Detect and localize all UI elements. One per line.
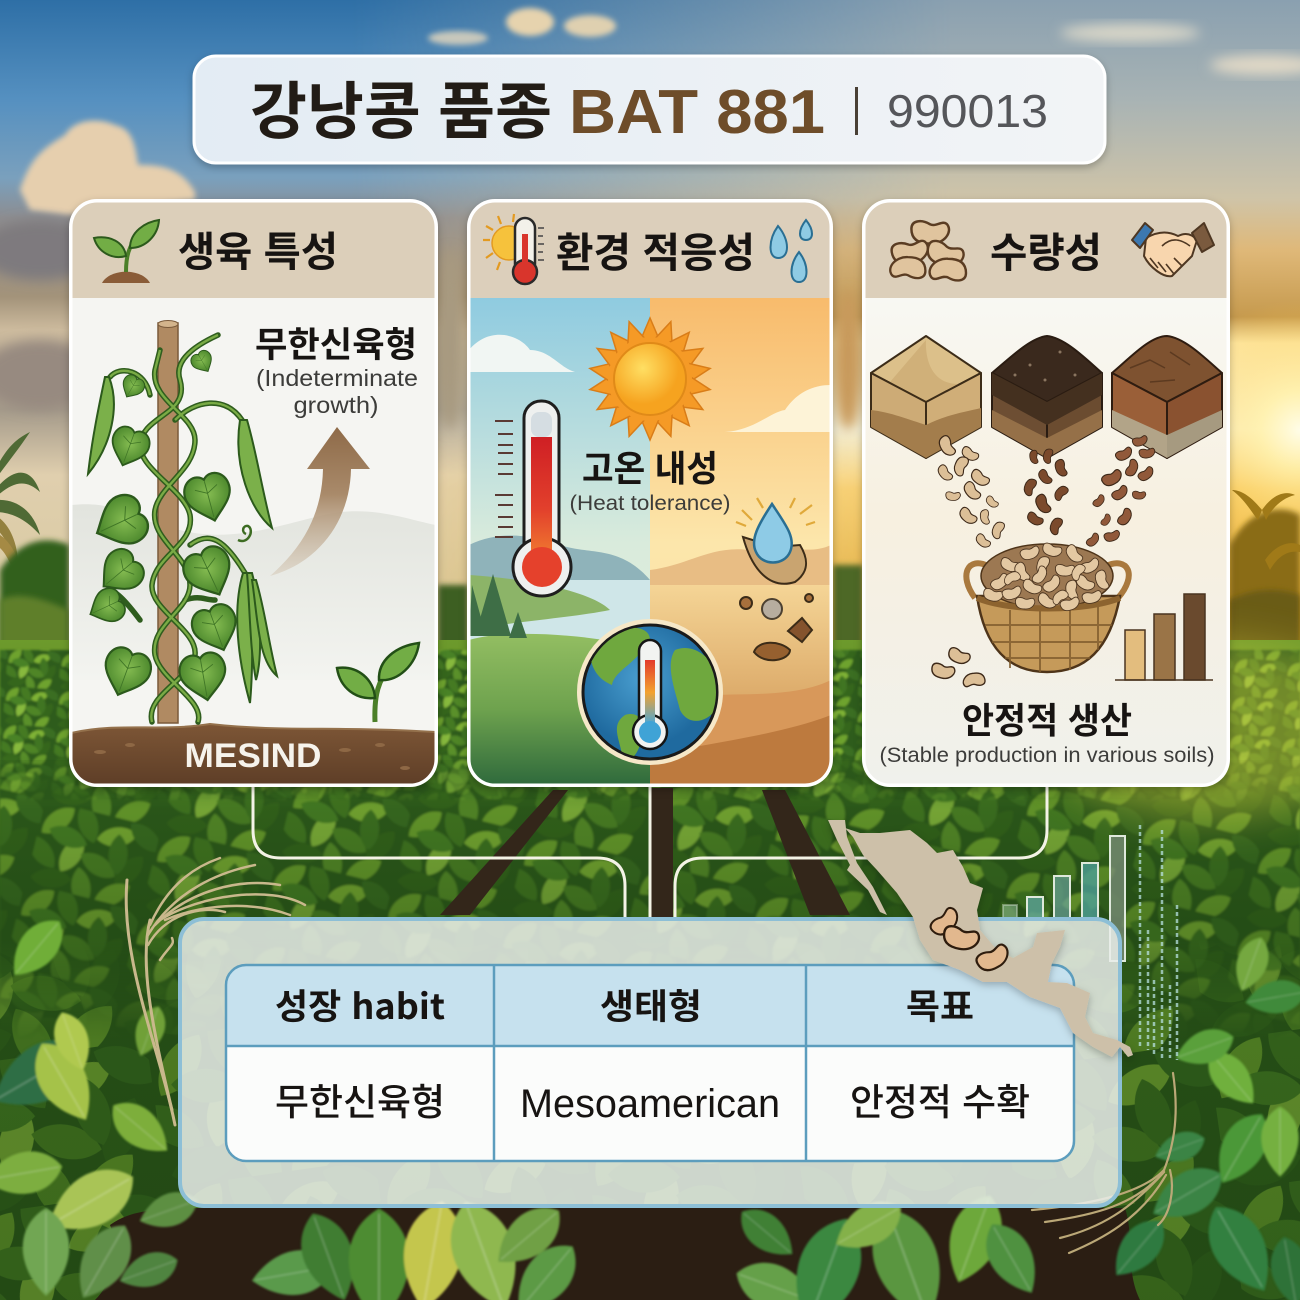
background: sunset sky (0, 0, 1300, 660)
rice stalk: left (126, 858, 305, 1125)
header: growth habit: 성장 habit (275, 979, 445, 1030)
header: goal: 목표 (906, 979, 974, 1030)
connector lines (253, 787, 1047, 918)
falling beans (936, 434, 1156, 550)
heading: 환경 적응성 (556, 219, 755, 279)
heading: 수량성 (990, 219, 1102, 279)
loose beans (931, 646, 986, 688)
header: ecotype: 생태형 (600, 979, 702, 1030)
soil sample: sandy (871, 336, 981, 458)
english label: (Stable production in various soils) (880, 744, 1214, 767)
panel: growth characteristics (69, 199, 438, 788)
icon: handshake (1132, 223, 1214, 276)
accession number: 990013 (887, 85, 1048, 137)
english label: (Indeterminate (256, 365, 418, 391)
value: stable harvest: 안정적 수확 (850, 1072, 1030, 1126)
soil label: MESIND (184, 737, 322, 775)
table (226, 965, 1074, 1161)
value: mesoamerican: Mesoamerican (520, 1082, 780, 1126)
icon: sun (588, 318, 712, 440)
chart bars behind map (1003, 825, 1177, 1060)
background: soybean field (0, 640, 1300, 1300)
panel: summary table card (180, 919, 1120, 1206)
title text: 강낭콩 품종 (250, 61, 552, 151)
map: Mexico and Central America (828, 820, 1133, 1057)
english label (256, 365, 418, 418)
english label: growth) (294, 392, 378, 418)
icon: bean pile (890, 221, 966, 280)
icon: water drops (770, 220, 812, 282)
heading: 생육 특성 (178, 218, 338, 278)
english label: (Heat tolerance) (570, 492, 730, 515)
soil sample: dark loam (992, 336, 1102, 458)
rice stalk: right (1032, 1073, 1176, 1253)
icon: globe with thermometer (577, 619, 723, 765)
soil sample: clay (1112, 336, 1222, 458)
arrow: upward growth (270, 427, 370, 576)
basket of beans (966, 542, 1129, 672)
icon: young seedling (337, 643, 419, 722)
background: tree line (0, 432, 1300, 660)
panel: yield (862, 199, 1230, 788)
icon: sun and thermometer (483, 214, 544, 284)
separator (855, 87, 858, 135)
growth type label: 무한신육형 (255, 317, 417, 368)
title bar (194, 56, 1105, 163)
icon: water drop and dry soil (736, 498, 815, 660)
bar chart: rising yield (1115, 594, 1213, 680)
panel: environmental adaptability (467, 199, 833, 788)
value: indeterminate: 무한신육형 (275, 1072, 445, 1126)
heat tolerance label: 고온 내성 (582, 440, 718, 492)
icon: large thermometer (495, 401, 571, 596)
variety name: BAT 881 (569, 78, 825, 147)
icon: sprout (94, 220, 159, 283)
illustration: climbing bean plant (83, 320, 277, 723)
stable production label: 안정적 생산 (962, 692, 1132, 744)
